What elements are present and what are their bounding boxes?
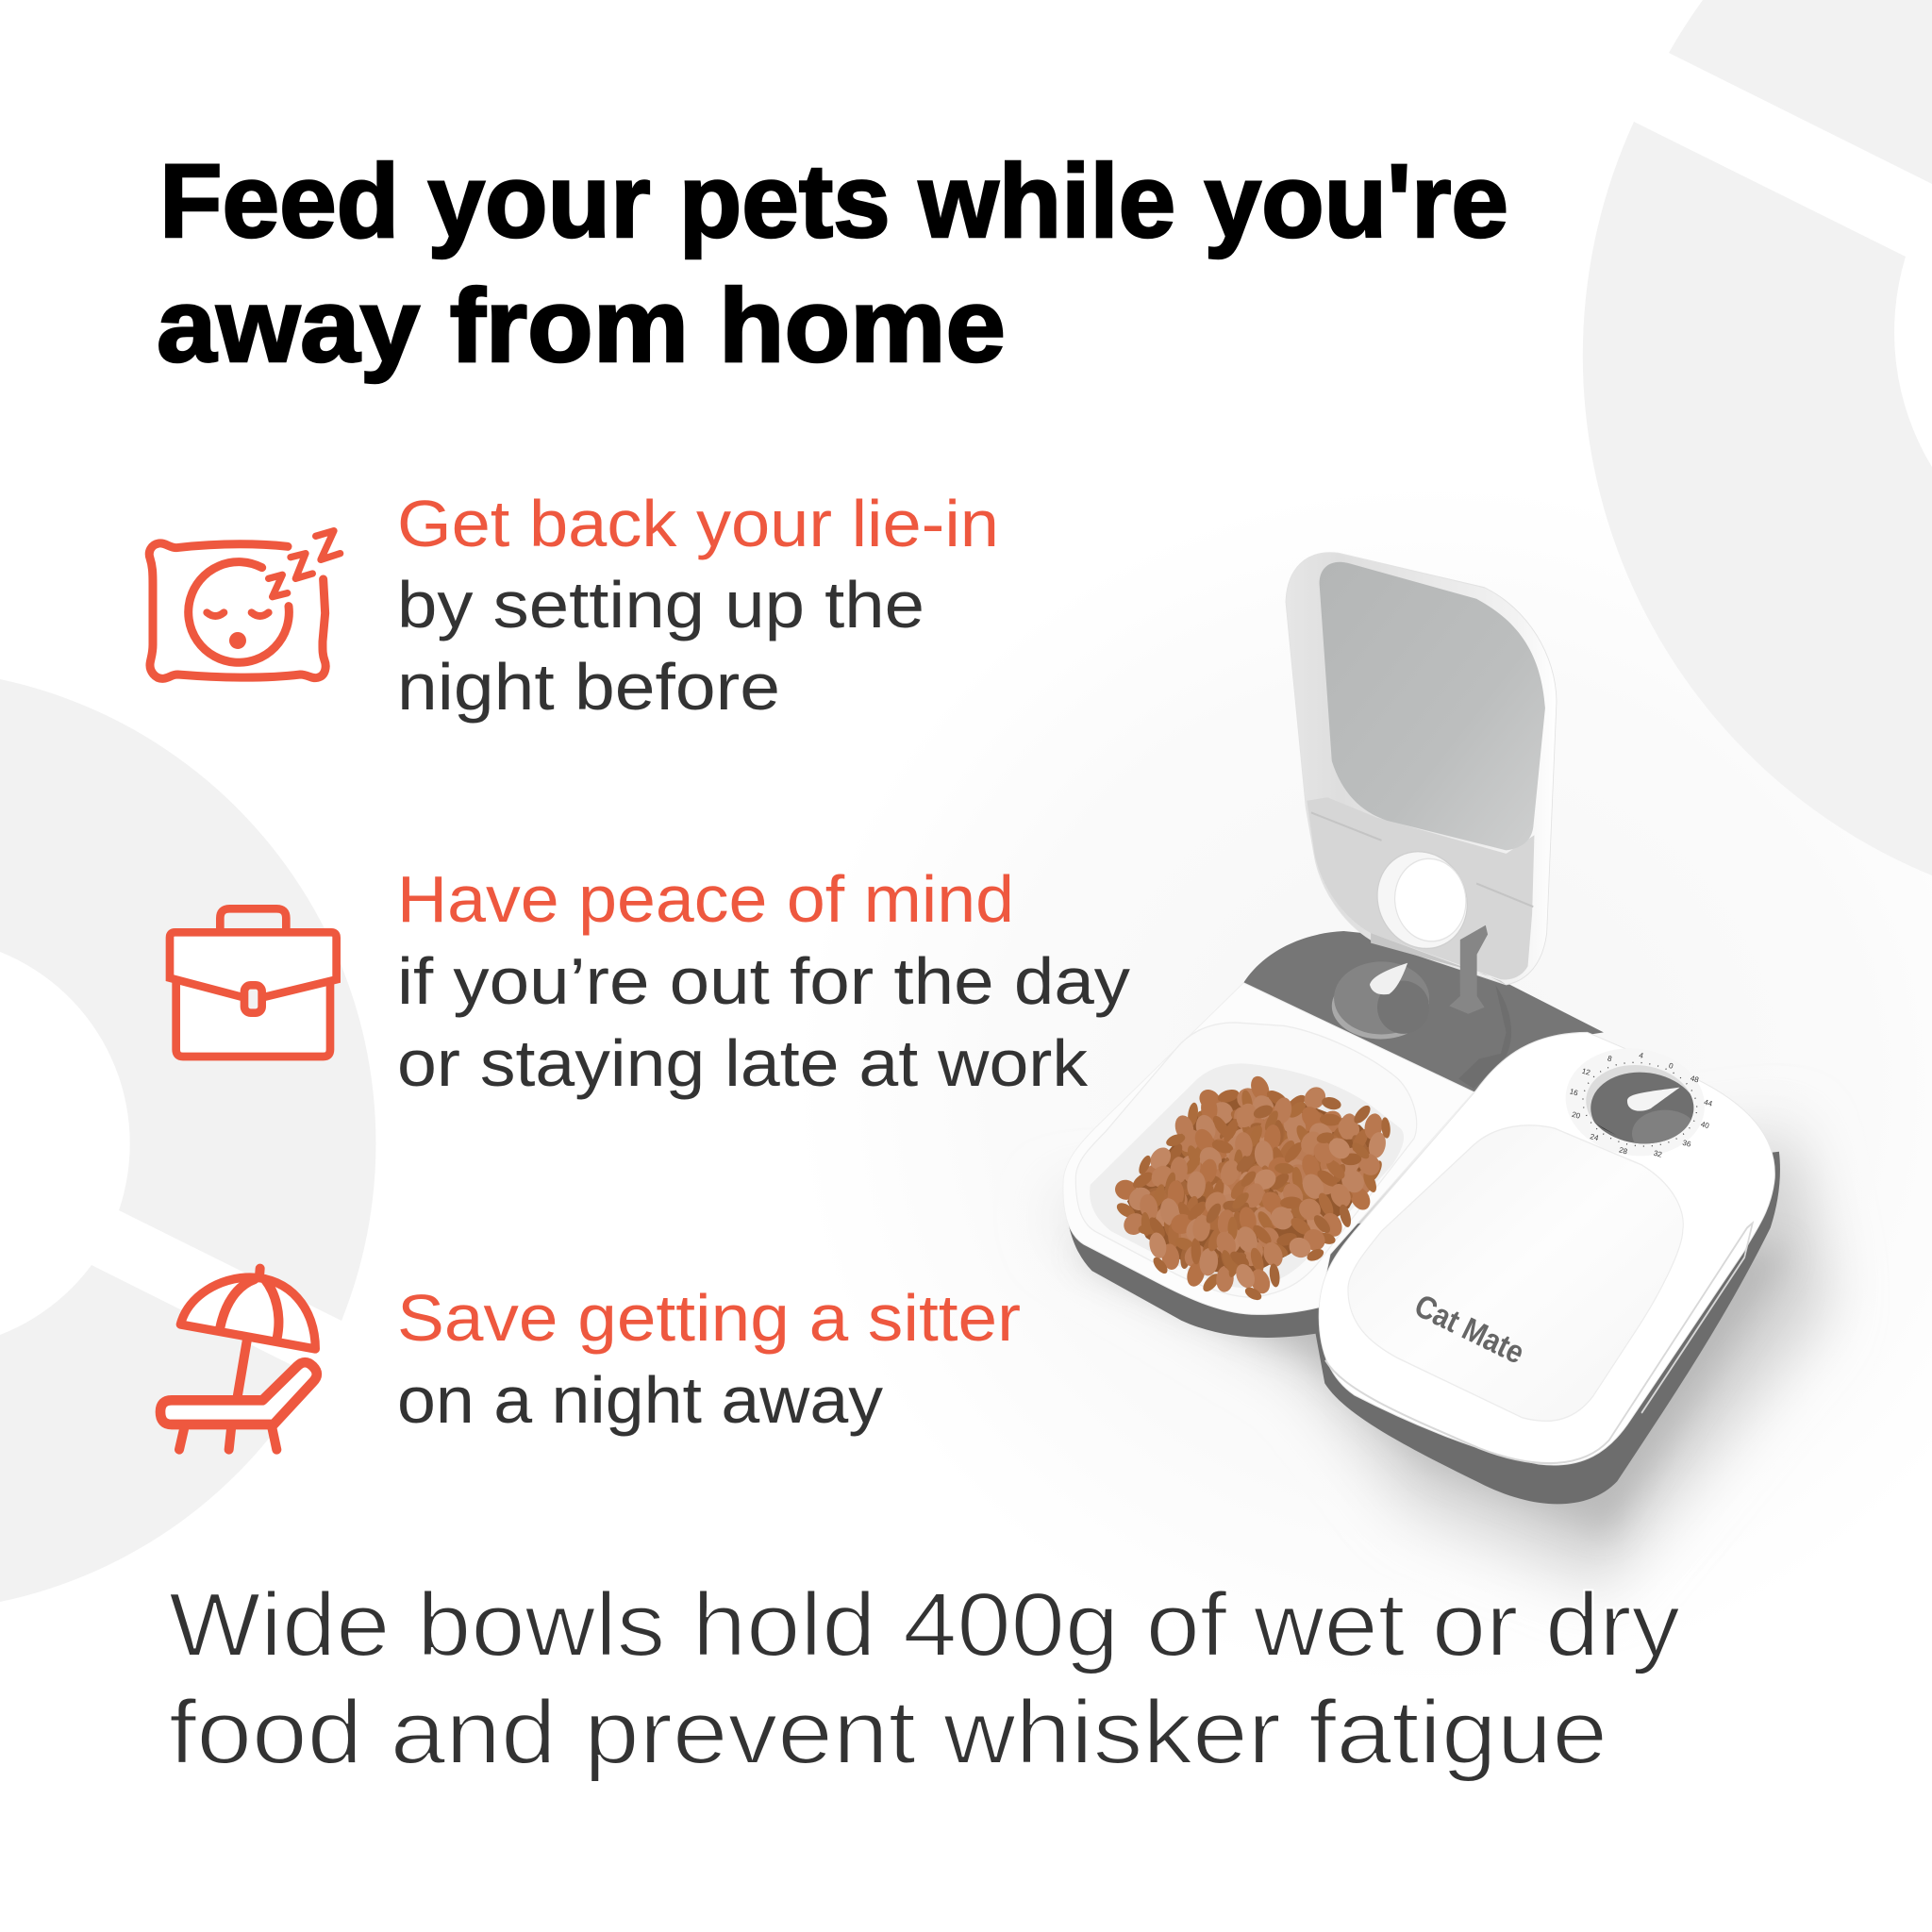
- lid rim line and latch: [1325, 1224, 1753, 1463]
- bottom statement: food and prevent whisker fatigue: [169, 1682, 1607, 1783]
- dial with timer scale: 0: [1668, 1061, 1674, 1071]
- deck hatch plate: [1458, 985, 1511, 1089]
- lid round opening: [1367, 838, 1477, 962]
- drop shadow under feeder: [1041, 1139, 1831, 1582]
- title: Feed your pets while you're: [159, 143, 1508, 259]
- dial with timer scale: [1566, 1049, 1712, 1158]
- lid recessed panel: [1348, 1125, 1683, 1421]
- grey deck: [1243, 931, 1604, 1092]
- text block: save getting a sitter: on a night away: [397, 1363, 883, 1437]
- bowl food area: [1090, 1063, 1404, 1288]
- dark base: [1064, 1152, 1780, 1504]
- lid lower section: [1307, 797, 1534, 980]
- dial with timer scale: 24: [1590, 1132, 1600, 1142]
- text block: save getting a sitter: Save getting a sitter: [397, 1281, 1021, 1355]
- brand name on lid: Cat Mate: [1408, 1288, 1530, 1372]
- text block: have peace of mind: if you’re out for the day: [397, 944, 1130, 1018]
- dial with timer scale: 40: [1700, 1120, 1710, 1130]
- product: automatic pet feeder: [1041, 553, 1831, 1582]
- dial with timer scale: 28: [1618, 1145, 1629, 1157]
- title: away from home: [157, 268, 1006, 384]
- icon: parasol and lounger: [160, 1269, 317, 1450]
- dial with timer scale: 20: [1571, 1110, 1582, 1121]
- text block: get back your lie-in: [397, 487, 999, 724]
- bowl rim: [1075, 1023, 1417, 1297]
- hinge strip: [1371, 933, 1507, 985]
- soft glow behind product: [792, 481, 1932, 1689]
- lid ledge lines: [1311, 812, 1533, 907]
- background logo shape: top right: [1583, 0, 1932, 875]
- left bowl tray: [1063, 983, 1474, 1314]
- icon: briefcase: [170, 908, 337, 1057]
- kibble pile: [1108, 1067, 1398, 1313]
- lever clip: [1449, 925, 1488, 1014]
- deck paddle dial: [1332, 961, 1429, 1039]
- background logo shape: left: [0, 679, 375, 1602]
- lid inner panel: [1320, 562, 1545, 850]
- text block: get back your lie-in: night before: [397, 650, 780, 724]
- dial with timer scale: 44: [1703, 1098, 1714, 1108]
- dial with timer scale: 16: [1569, 1087, 1579, 1098]
- dial with timer scale: 36: [1682, 1139, 1692, 1149]
- text block: have peace of mind: [397, 862, 1130, 1100]
- bottom statement: Wide bowls hold 400g of wet or dry: [169, 1574, 1680, 1675]
- lid outer shell: [1286, 553, 1557, 985]
- text block: get back your lie-in: Get back your lie-in: [397, 487, 999, 560]
- dial with timer scale: 32: [1653, 1149, 1663, 1159]
- dial with timer scale: 48: [1690, 1074, 1700, 1085]
- dial with timer scale: 8: [1607, 1054, 1613, 1063]
- icon: sleeping face on pillow: [149, 531, 341, 678]
- title: [157, 143, 1508, 384]
- feeder body drawn in crop coordinates: [1063, 553, 1780, 1504]
- dial with timer scale: 12: [1581, 1067, 1591, 1077]
- bottom statement: [169, 1574, 1680, 1783]
- text block: save getting a sitter: [397, 1281, 1021, 1437]
- text block: have peace of mind: Have peace of mind: [397, 862, 1014, 936]
- open lid: [1286, 553, 1557, 985]
- dial with timer scale: 4: [1638, 1051, 1644, 1060]
- text block: get back your lie-in: by setting up the: [397, 568, 924, 641]
- text block: have peace of mind: or staying late at work: [397, 1026, 1089, 1100]
- right unit closed lid: [1319, 1032, 1774, 1465]
